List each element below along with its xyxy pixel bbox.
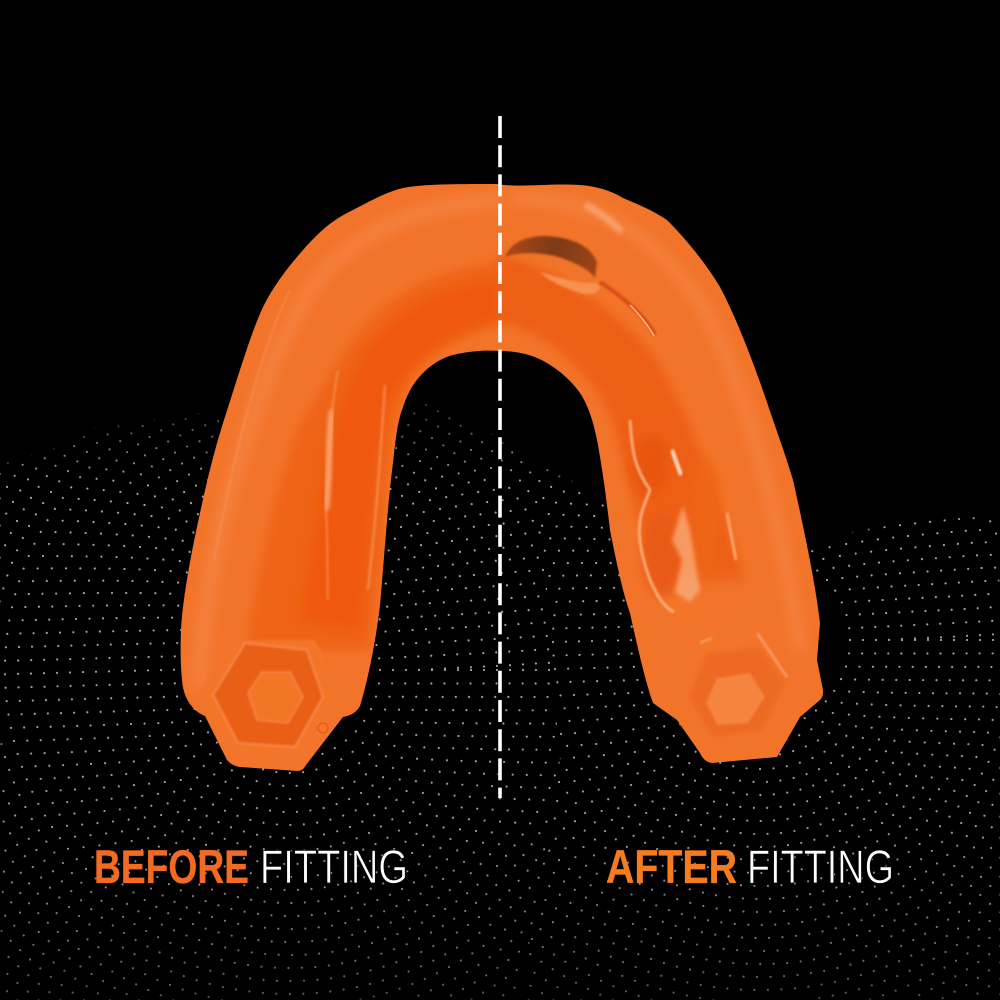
left outer rim shading [200,200,500,690]
right hexagon recess [688,647,785,737]
left outer edge highlight [214,290,290,560]
left trough ridge line [326,370,338,600]
top rim highlight [585,205,622,232]
left inner rim highlight [368,385,385,590]
left trough [246,262,502,650]
label: before fitting [94,840,408,893]
mouthguard [181,184,823,771]
after word: AFTER [606,840,737,893]
cavity tear slit [600,282,655,335]
left hexagon small dimple [318,723,328,733]
left hexagon rim [198,640,347,770]
centre dashed divider [498,116,502,798]
label: after fitting [606,840,894,893]
right lower lightening [640,580,800,750]
hex edge glints [700,633,787,677]
left trough inner channel [300,280,502,630]
top cavity [505,236,597,278]
right tooth impressions [630,435,670,495]
left hexagon boss [248,672,303,723]
right outer rim shading [510,198,800,650]
fitting word left: FITTING [260,840,408,893]
right hexagon boss [706,673,765,725]
mouthguard base shape [181,184,823,771]
fitting word right: FITTING [747,840,894,893]
left trough ridge highlight [326,410,332,510]
dotted wave terrain [0,404,1000,1000]
right trough [498,252,746,582]
cavity lip [540,272,600,294]
impression highlights [630,420,674,612]
before word: BEFORE [94,840,249,893]
right hexagon [688,647,785,737]
left hexagon recess [213,643,323,747]
